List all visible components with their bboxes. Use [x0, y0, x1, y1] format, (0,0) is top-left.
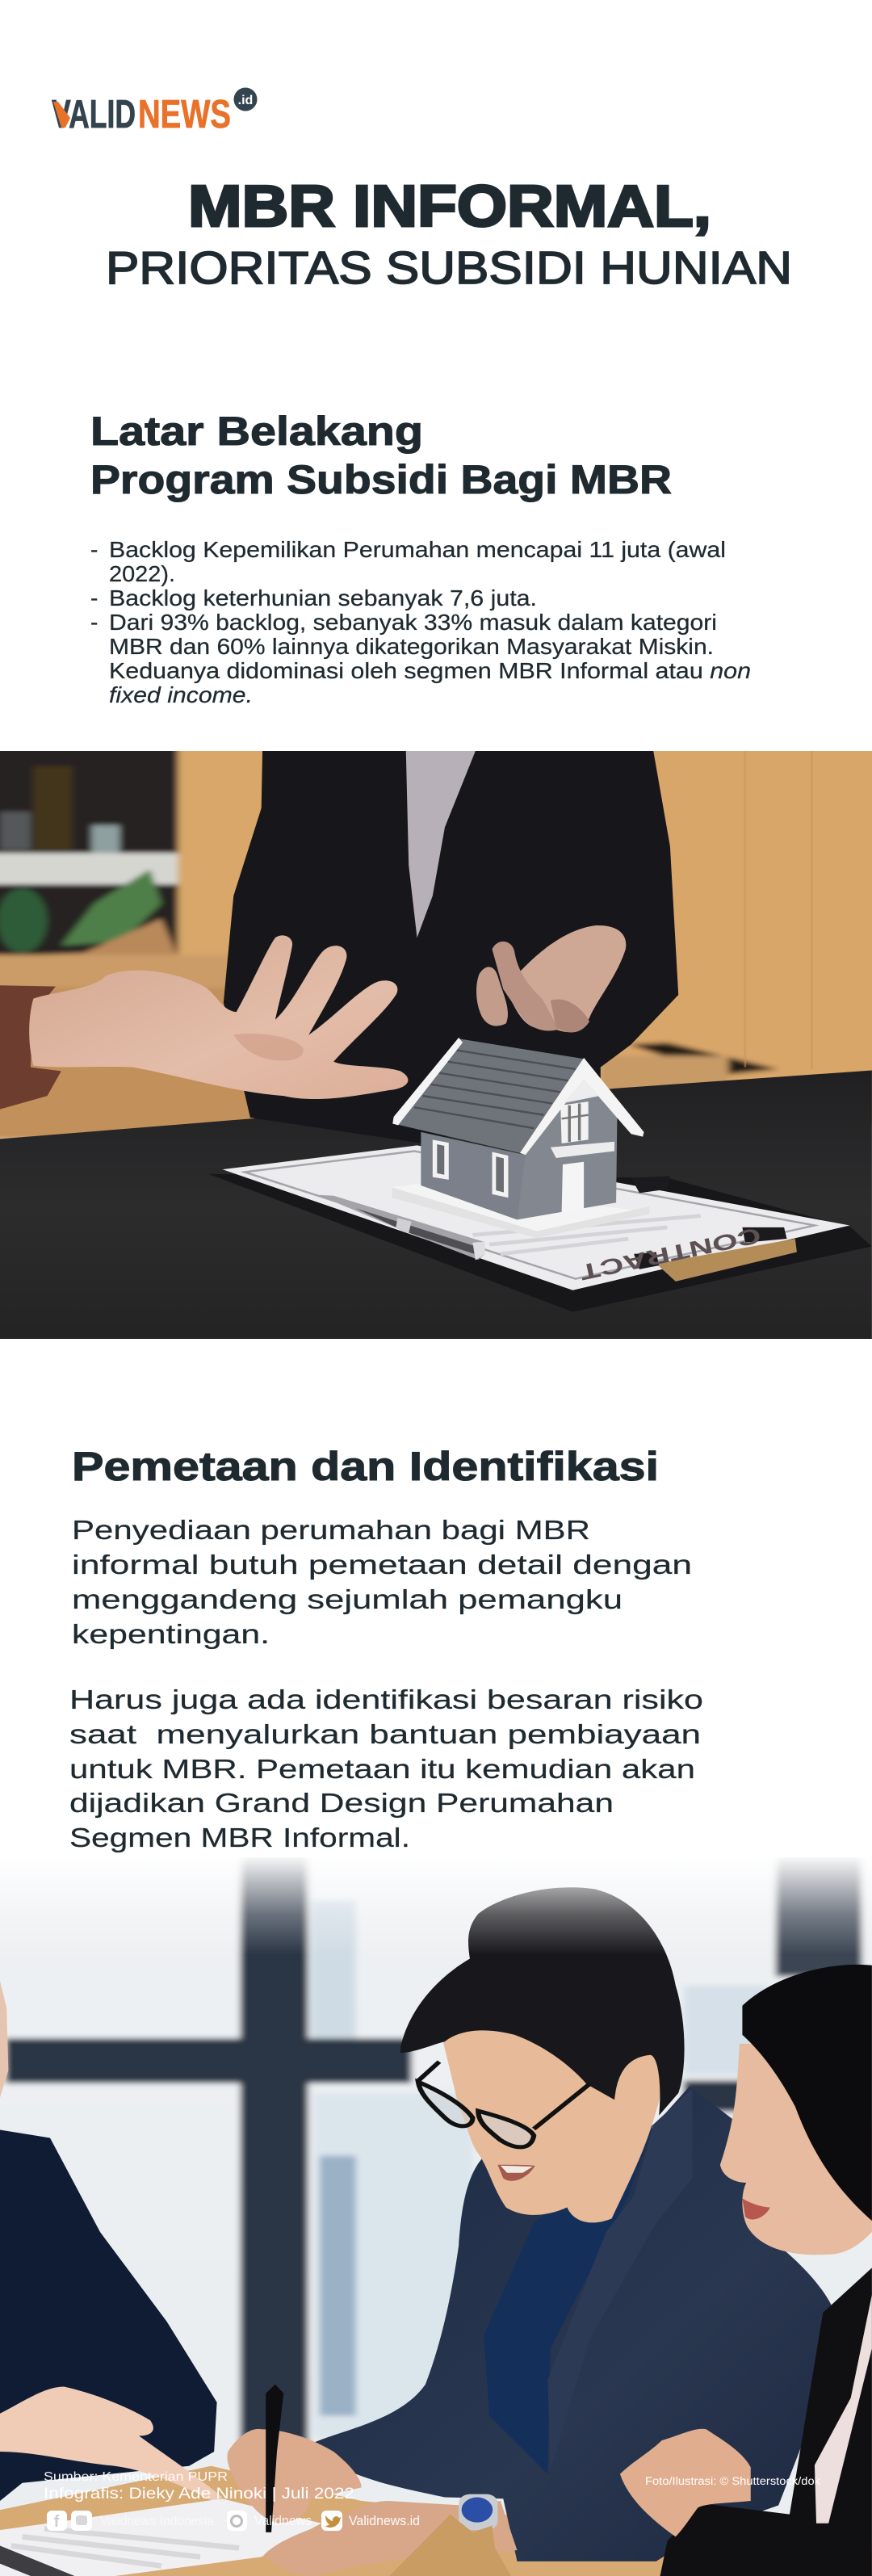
left person suit [0, 2129, 217, 2501]
text block: backlog bullet list [90, 537, 751, 707]
text block: paragraph on mapping: informal butuh pemetaan detail dengan [72, 1550, 692, 1580]
label: Validnews Indonesia: Validnews Indonesia [100, 2514, 215, 2528]
icon: facebook: f [54, 2513, 60, 2531]
clip [631, 1176, 797, 1282]
text block: paragraph on risk identification: Harus juga ada identifikasi besaran risiko [69, 1684, 703, 1714]
text block: backlog bullet list: Keduanya didominasi oleh segmen MBR Informal atau non [109, 658, 751, 683]
label: Validnews: Validnews [254, 2514, 312, 2528]
heading: Latar Belakang Program Subsidi Bagi MBR [90, 409, 672, 502]
left hand [29, 935, 408, 1099]
woman: jacket [659, 2268, 872, 2576]
logo: Validnews.id: VALID [52, 93, 136, 136]
woman: lips [742, 2198, 770, 2219]
heading: Latar Belakang Program Subsidi Bagi MBR: Latar Belakang [90, 409, 423, 454]
icon: youtube [71, 2511, 92, 2531]
model house [208, 1038, 872, 1312]
man: lapel [547, 2090, 692, 2417]
text block: paragraph on risk identification: Segmen MBR Informal. [69, 1823, 410, 1852]
icon: twitter [321, 2511, 342, 2531]
icon: facebook [47, 2511, 67, 2531]
text block: paragraph on risk identification: dijadikan Grand Design Perumahan [69, 1788, 614, 1818]
woman: hair [742, 1965, 872, 2221]
wristwatch [459, 2494, 497, 2530]
printed word on the contract: CONTRACT [577, 1223, 763, 1285]
table top [0, 1070, 872, 1345]
text block: paragraph on risk identification [69, 1684, 703, 1852]
text block: backlog bullet list: - [90, 585, 98, 610]
text block: paragraph on risk identification: untuk MBR. Pemetaan itu kemudian akan [69, 1754, 695, 1784]
thumb nail and crease [233, 1034, 304, 1060]
blouse [406, 751, 476, 938]
credit: source: Sumber: Kementerian PUPR [44, 2470, 228, 2484]
text block: backlog bullet list: fixed income. [109, 682, 253, 707]
credit: infographic author: Infografis: Dieky Ade Ninoki | Juli 2022 [44, 2486, 354, 2503]
heading: Latar Belakang Program Subsidi Bagi MBR: Program Subsidi Bagi MBR [90, 457, 672, 502]
pen [318, 1195, 485, 1260]
logo: Validnews.id: .id [238, 94, 253, 107]
man: mouth [497, 2165, 535, 2181]
man: glasses [417, 2062, 589, 2147]
text block: backlog bullet list: 2022). [109, 561, 175, 586]
photo background: office shelf and wood wall [0, 744, 872, 1139]
text block: backlog bullet list: Backlog Kepemilikan Perumahan mencapai 11 juta (awal [109, 537, 726, 562]
text block: backlog bullet list: - [90, 537, 98, 562]
text block: paragraph on mapping: menggandeng sejumlah pemangku [72, 1584, 623, 1614]
label: Validnews.id: Validnews.id [349, 2514, 420, 2528]
title: PRIORITAS SUBSIDI HUNIAN [106, 242, 792, 294]
man: other hand [264, 2501, 517, 2576]
text block: backlog bullet list: - [90, 610, 98, 635]
logo: Validnews.id [52, 87, 257, 136]
wood wall panels [745, 751, 812, 1069]
sleeve of left person [0, 985, 61, 1110]
text block: backlog bullet list: Dari 93% backlog, sebanyak 33% masuk dalam kategori [109, 610, 717, 635]
man: face [439, 2026, 661, 2222]
text block: paragraph on mapping: kepentingan. [72, 1619, 270, 1649]
title: MBR INFORMAL, [188, 174, 711, 239]
photo: couple signing a housing contract [0, 1847, 872, 2576]
woman: face [720, 2044, 872, 2255]
man: jacket [312, 2087, 836, 2561]
man: writing hand [227, 2429, 362, 2524]
person in black suit [224, 751, 678, 1143]
text block: backlog bullet list: MBR dan 60% lainnya dikategorikan Masyarakat Miskin. [109, 634, 714, 659]
office window background [0, 1847, 872, 2576]
social media row [47, 2511, 420, 2531]
credit: photo: Foto/Ilustrasi: © Shutterstock/dok [645, 2475, 820, 2487]
man: shirt [484, 2125, 653, 2474]
text block: paragraph on risk identification: saat menyalurkan bantuan pembiayaan [69, 1719, 701, 1749]
logo: Validnews.id: NEWS [138, 93, 231, 136]
wooden house model [384, 2515, 514, 2576]
heading: Pemetaan dan Identifikasi: Pemetaan dan Identifikasi [72, 1444, 659, 1489]
text block: paragraph on mapping: Penyediaan perumahan bagi MBR [72, 1515, 590, 1545]
woman: blouse [815, 2295, 872, 2524]
table [0, 2466, 872, 2576]
text block: backlog bullet list: Backlog keterhunian sebanyak 7,6 juta. [109, 585, 537, 610]
man: hair [400, 1887, 685, 2116]
paper and clipboard [208, 1174, 872, 1312]
icon: instagram [227, 2511, 247, 2531]
left person's face edge [0, 1981, 8, 2098]
right hand [476, 925, 626, 1033]
paper contract [0, 2498, 321, 2576]
left person's hand [0, 2386, 222, 2502]
title [106, 174, 792, 294]
text block: paragraph on mapping [72, 1515, 692, 1649]
woman: hand [620, 2429, 751, 2536]
white fade at top of photo [0, 1854, 872, 1955]
pen [266, 2385, 283, 2532]
photo: hands presenting a model house on a contract [0, 744, 872, 1345]
